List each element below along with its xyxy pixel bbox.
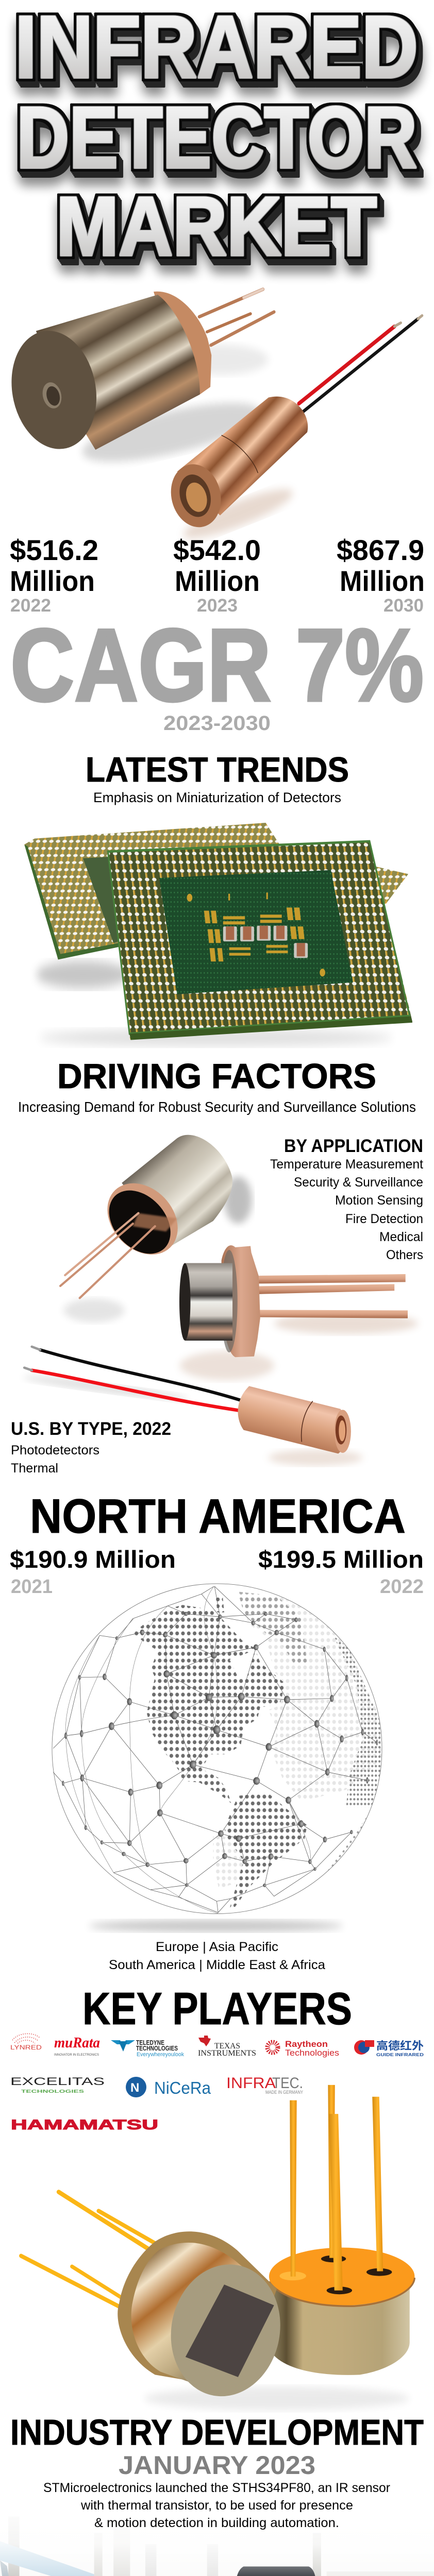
heading: driving factors: DRIVING FACTORS bbox=[57, 1057, 376, 1096]
image: three laser and detector modules bbox=[22, 1135, 418, 1465]
title: Infrared Detector Market bbox=[15, 0, 418, 273]
Hudson Bay gap bbox=[230, 1652, 255, 1676]
globe: dotted world with network mesh bbox=[52, 1584, 383, 1932]
large detector flange bbox=[154, 292, 211, 395]
lens hole bbox=[40, 380, 64, 411]
stat: North America 2021: $190.9 Million bbox=[10, 1546, 176, 1573]
right sensor pins bbox=[290, 2085, 383, 2291]
dark dotted North America bbox=[133, 1605, 285, 1780]
stat: 2023 market size: Million bbox=[175, 565, 260, 597]
logo: Teledyne: Everywhereyoulook bbox=[137, 2052, 184, 2058]
stat: North America 2022: $199.5 Million bbox=[258, 1546, 424, 1573]
module A body bbox=[122, 1135, 232, 1247]
logo: Nicera: NiCeRa bbox=[154, 2078, 211, 2097]
segment list: by application: Medical bbox=[379, 1230, 423, 1244]
small detector end face bbox=[163, 456, 229, 535]
stat: 2023 market size: 2023 bbox=[197, 596, 238, 616]
stat: North America 2022: 2022 bbox=[380, 1576, 424, 1598]
logo: Guide Infrared bbox=[354, 2040, 424, 2057]
camera head bbox=[235, 2567, 316, 2576]
stat: 2022 market size: 2022 bbox=[10, 596, 51, 616]
logo: Lynred: LYNRED bbox=[10, 2044, 42, 2051]
stat: 2022 market size bbox=[10, 534, 98, 616]
module B pins bbox=[259, 1274, 408, 1318]
left sensor back flange bbox=[118, 2231, 277, 2389]
gold contacts bbox=[187, 892, 325, 976]
segment list: by application: Fire Detection bbox=[345, 1212, 423, 1226]
logo: Murata: muRata bbox=[54, 2035, 100, 2051]
logo: Teledyne: TELEDYNE bbox=[136, 2039, 164, 2046]
left sensor face bbox=[157, 2250, 295, 2410]
wires of small detector bbox=[299, 316, 422, 412]
chip centre bbox=[159, 870, 353, 994]
image: two gold-pin pyroelectric sensors bbox=[21, 2085, 414, 2410]
stat: 2022 market size: $516.2 bbox=[10, 534, 98, 566]
logo: InfraTec: MADE IN GERMANY bbox=[265, 2090, 303, 2095]
logo: Murata: INNOVATOR IN ELECTRONICS bbox=[54, 2054, 99, 2057]
top fade of photo bbox=[0, 2500, 434, 2576]
logo: Excelitas: EXCELITAS bbox=[10, 2076, 105, 2088]
image: CPU chips with gold pins bbox=[24, 823, 412, 1046]
stat: 2030 market size: $867.9 bbox=[337, 534, 424, 566]
logo: Teledyne: TECHNOLOGIES bbox=[136, 2045, 178, 2052]
capacitors bbox=[223, 926, 308, 958]
logo: Nicera bbox=[126, 2077, 211, 2097]
logo: Excelitas: TECHNOLOGIES bbox=[21, 2089, 85, 2094]
logo: Guide Infrared: 高德红外 bbox=[376, 2040, 424, 2052]
image: thermal camera inspecting pumps bbox=[0, 2500, 434, 2576]
date: January 2023: JANUARY 2023 bbox=[119, 2451, 315, 2480]
logo: Teledyne bbox=[111, 2039, 184, 2058]
logo: Lynred bbox=[10, 2033, 42, 2051]
list: other regions: Europe | Asia Pacific bbox=[156, 1940, 278, 1954]
heading: North America: NORTH AMERICA bbox=[30, 1489, 406, 1543]
front chip bbox=[108, 841, 412, 1040]
Central America dots bbox=[180, 1768, 231, 1803]
list: other regions bbox=[109, 1940, 325, 1972]
stat: 2023 market size bbox=[173, 534, 261, 616]
small detector body bbox=[177, 397, 308, 515]
back chip bbox=[24, 823, 408, 959]
left sensor pins bbox=[21, 2192, 156, 2307]
stat: 2030 market size bbox=[337, 534, 425, 616]
segment list: U.S. by type: U.S. BY TYPE, 2022 bbox=[11, 1419, 171, 1439]
module C body bbox=[238, 1386, 348, 1454]
logo: Hamamatsu: HAMAMATSU bbox=[11, 2117, 158, 2132]
logo: Texas Instruments: TEXAS bbox=[214, 2042, 240, 2050]
dark dotted South America bbox=[224, 1793, 307, 1908]
right sensor holes and pads bbox=[279, 2255, 392, 2294]
list: other regions: South America | Middle East & Africa bbox=[109, 1958, 325, 1972]
subheading: security demand: Increasing Demand for Robust Security and Surveillance Solutions bbox=[18, 1099, 416, 1115]
stat: 2022 market size: Million bbox=[10, 565, 95, 597]
small detector shadow bbox=[180, 481, 296, 547]
logo: Raytheon bbox=[268, 2039, 339, 2058]
segment list: by application: Security & Surveillance bbox=[294, 1175, 423, 1190]
image: two cylindrical infrared detectors bbox=[1, 289, 422, 547]
module B barrel bbox=[185, 1263, 232, 1341]
large detector front face bbox=[1, 321, 108, 459]
right sensor body bbox=[273, 2276, 410, 2375]
stat: 2023 market size: $542.0 bbox=[173, 534, 261, 566]
globe outline bbox=[52, 1584, 382, 1914]
logo: Texas Instruments bbox=[198, 2036, 256, 2058]
stat: North America 2022 bbox=[258, 1546, 424, 1598]
heading: key players: KEY PLAYERS bbox=[82, 1983, 352, 2034]
segment list: by application: Motion Sensing bbox=[335, 1193, 423, 1208]
segment list: U.S. by type: Thermal bbox=[11, 1461, 58, 1476]
module A rear face bbox=[96, 1179, 183, 1265]
stat: North America 2021: 2021 bbox=[11, 1576, 53, 1598]
subheading: miniaturization: Emphasis on Miniaturization of Detectors bbox=[93, 790, 341, 805]
text: STMicroelectronics development: STMicroelectronics launched the STHS34PF80, an IR sensor bbox=[43, 2481, 390, 2495]
light dotted landmass bbox=[213, 1595, 382, 1889]
segment list: by application: Others bbox=[386, 1248, 423, 1262]
heading: latest trends: LATEST TRENDS bbox=[86, 750, 349, 789]
logo: Raytheon: Raytheon bbox=[285, 2039, 328, 2049]
stat: North America 2021 bbox=[10, 1546, 176, 1598]
logo: Excelitas bbox=[10, 2076, 105, 2094]
module B flange bbox=[222, 1245, 260, 1357]
logos: key players bbox=[10, 2033, 424, 2132]
stat: 2030 market size: 2030 bbox=[383, 596, 424, 616]
module C end face bbox=[335, 1410, 351, 1453]
mesh nodes bbox=[62, 1612, 378, 1887]
left structures bbox=[0, 2517, 321, 2576]
segment list: by application bbox=[270, 1136, 423, 1262]
logo: InfraTec: INFRA bbox=[226, 2075, 276, 2092]
sensor window bbox=[186, 2284, 274, 2377]
text: STMicroelectronics development: & motion detection in building automation. bbox=[94, 2516, 339, 2530]
segment list: by application: BY APPLICATION bbox=[284, 1136, 423, 1156]
module A pins bbox=[60, 1213, 155, 1298]
title: Infrared Detector Market: MARKET bbox=[56, 180, 377, 273]
left sensor barrel bbox=[131, 2243, 266, 2389]
module C wires bbox=[24, 1347, 241, 1410]
text: STMicroelectronics development bbox=[43, 2481, 390, 2530]
background wall bbox=[0, 2500, 434, 2576]
segment list: U.S. by type: Photodetectors bbox=[11, 1443, 99, 1458]
segment list: U.S. by type bbox=[11, 1419, 171, 1476]
module A flange bbox=[93, 1170, 192, 1268]
dark dotted Asia at limb bbox=[333, 1636, 383, 1807]
text: STMicroelectronics development: with thermal transistor, to be used for presence bbox=[80, 2498, 353, 2513]
right sensor gold top bbox=[269, 2248, 414, 2306]
stat: 2030 market size: Million bbox=[340, 565, 425, 597]
mesh lines bbox=[53, 1586, 377, 1912]
logo: Nicera: N bbox=[130, 2081, 139, 2095]
pins of large detector bbox=[199, 289, 274, 345]
segment list: by application: Temperature Measurement bbox=[270, 1157, 423, 1172]
logo: InfraTec bbox=[226, 2075, 303, 2095]
logo: Guide Infrared: GUIDE INFRARED bbox=[376, 2052, 424, 2057]
CAGR period: 2023-2030 bbox=[163, 712, 271, 735]
logo: Raytheon: Technologies bbox=[285, 2048, 339, 2058]
logo: InfraTec: TEC. bbox=[272, 2075, 303, 2092]
large detector body bbox=[36, 295, 200, 450]
logo: Texas Instruments: INSTRUMENTS bbox=[198, 2049, 256, 2058]
